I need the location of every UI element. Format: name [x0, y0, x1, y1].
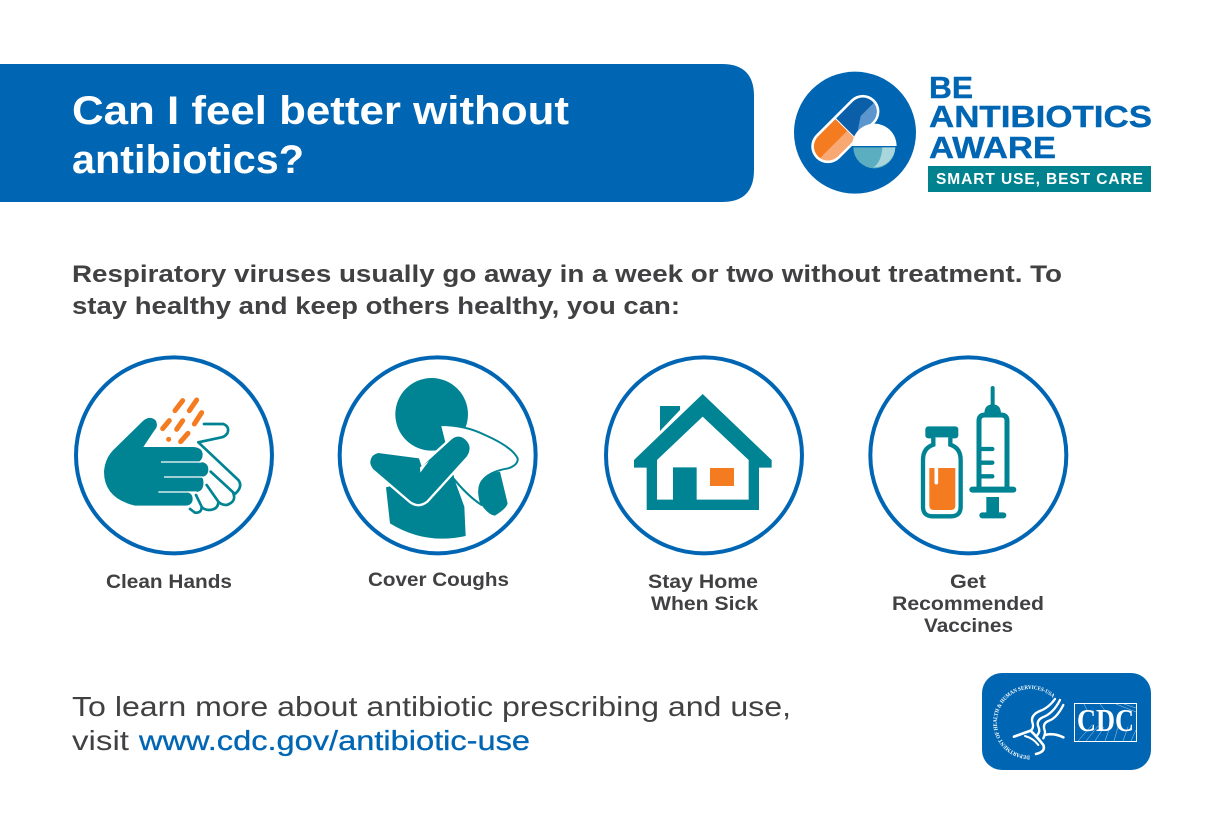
label: get recommended vaccines: Vaccines	[924, 616, 1013, 637]
tagline bar: SMART USE, BEST CARE	[936, 171, 1143, 188]
footer text: www.cdc.gov/antibiotic-use	[138, 725, 530, 756]
icon: cover coughs	[340, 357, 536, 553]
vial	[923, 426, 961, 516]
icon: pill and bowl	[794, 72, 916, 194]
label: get recommended vaccines	[892, 572, 1044, 637]
label: stay home when sick: Stay Home	[648, 572, 758, 593]
intro text: stay healthy and keep others healthy, you can:	[72, 293, 680, 320]
logo wordmark: BE	[929, 70, 973, 105]
logo: Be Antibiotics Aware	[794, 70, 1152, 194]
label: stay home when sick	[648, 572, 758, 615]
footer text: visit	[72, 725, 129, 756]
intro text: Respiratory viruses usually go away in a week or two without treatment. To	[72, 261, 1062, 288]
CDC mark: CDC	[1077, 702, 1134, 738]
syringe	[972, 388, 1013, 515]
logo: HHS and CDC	[982, 673, 1151, 770]
footer text	[72, 691, 791, 756]
footer text: To learn more about antibiotic prescribing and use,	[72, 691, 791, 722]
icon: vaccines	[870, 357, 1066, 553]
logo wordmark	[929, 70, 1152, 165]
label: get recommended vaccines: Get	[950, 572, 987, 593]
icon: stay home	[606, 357, 802, 553]
HHS seal text: DEPARTMENT OF HEALTH & HUMAN SERVICES-USA	[993, 685, 1054, 760]
logo wordmark: AWARE	[929, 130, 1056, 165]
tagline bar	[928, 166, 1151, 192]
label: stay home when sick: When Sick	[651, 594, 758, 615]
title	[72, 89, 569, 182]
label: clean hands: Clean Hands	[106, 572, 232, 593]
header banner	[0, 64, 754, 202]
label: get recommended vaccines: Recommended	[892, 594, 1044, 615]
label: cover coughs: Cover Coughs	[368, 570, 509, 591]
HHS eagle	[1014, 699, 1063, 754]
icon: clean hands	[76, 357, 272, 553]
title: Can I feel better without	[72, 89, 569, 133]
intro text	[72, 261, 1062, 320]
logo wordmark: ANTIBIOTICS	[929, 99, 1152, 134]
title: antibiotics?	[72, 138, 304, 182]
